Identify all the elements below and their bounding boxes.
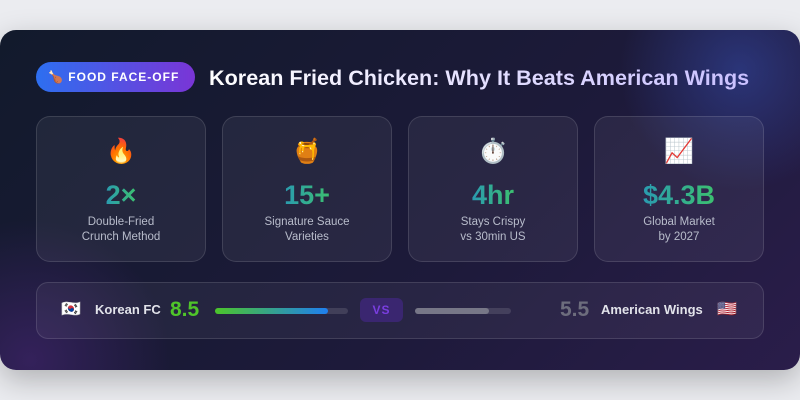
card: crispy: 4hr xyxy=(472,180,514,210)
card: market: 📈 xyxy=(664,138,694,165)
vs badge: VS xyxy=(372,303,390,317)
card: double-fried: Crunch Method xyxy=(82,231,160,243)
card: sauces xyxy=(222,116,392,262)
korean side: 🇰🇷 xyxy=(61,301,81,318)
card: sauces: Varieties xyxy=(285,231,329,243)
card: market: by 2027 xyxy=(659,231,699,243)
comparison bar xyxy=(36,282,764,339)
card: market xyxy=(594,116,764,262)
card: crispy: ⏱️ xyxy=(478,138,508,165)
american bar xyxy=(415,308,511,314)
comparison bar: American Wings xyxy=(601,302,703,317)
card: double-fried: 2× xyxy=(106,180,136,210)
card: crispy: Stays Crispy xyxy=(461,216,525,228)
comparison bar: Korean FC xyxy=(95,302,161,317)
card: double-fried: 🔥 xyxy=(106,138,136,165)
vs badge xyxy=(360,298,403,322)
card: crispy xyxy=(408,116,578,262)
badge: 🍗 FOOD FACE-OFF xyxy=(48,70,179,84)
card: market: $4.3B xyxy=(643,180,715,210)
card: sauces: 15+ xyxy=(284,180,330,210)
card: double-fried xyxy=(36,116,206,262)
card: sauces: 🍯 xyxy=(292,138,322,165)
card: market: Global Market xyxy=(643,216,715,228)
card: sauces: Signature Sauce xyxy=(264,216,350,228)
card: double-fried: Double-Fried xyxy=(88,216,154,228)
badge xyxy=(36,62,195,92)
card: crispy: vs 30min US xyxy=(460,231,526,243)
comparison bar: 8.5 xyxy=(170,298,199,321)
korean bar xyxy=(215,308,348,314)
comparison bar: 🇺🇸 xyxy=(717,301,737,318)
title: Korean Fried Chicken: Why It Beats American Wings xyxy=(209,65,749,90)
american side: 5.5 xyxy=(560,298,589,321)
